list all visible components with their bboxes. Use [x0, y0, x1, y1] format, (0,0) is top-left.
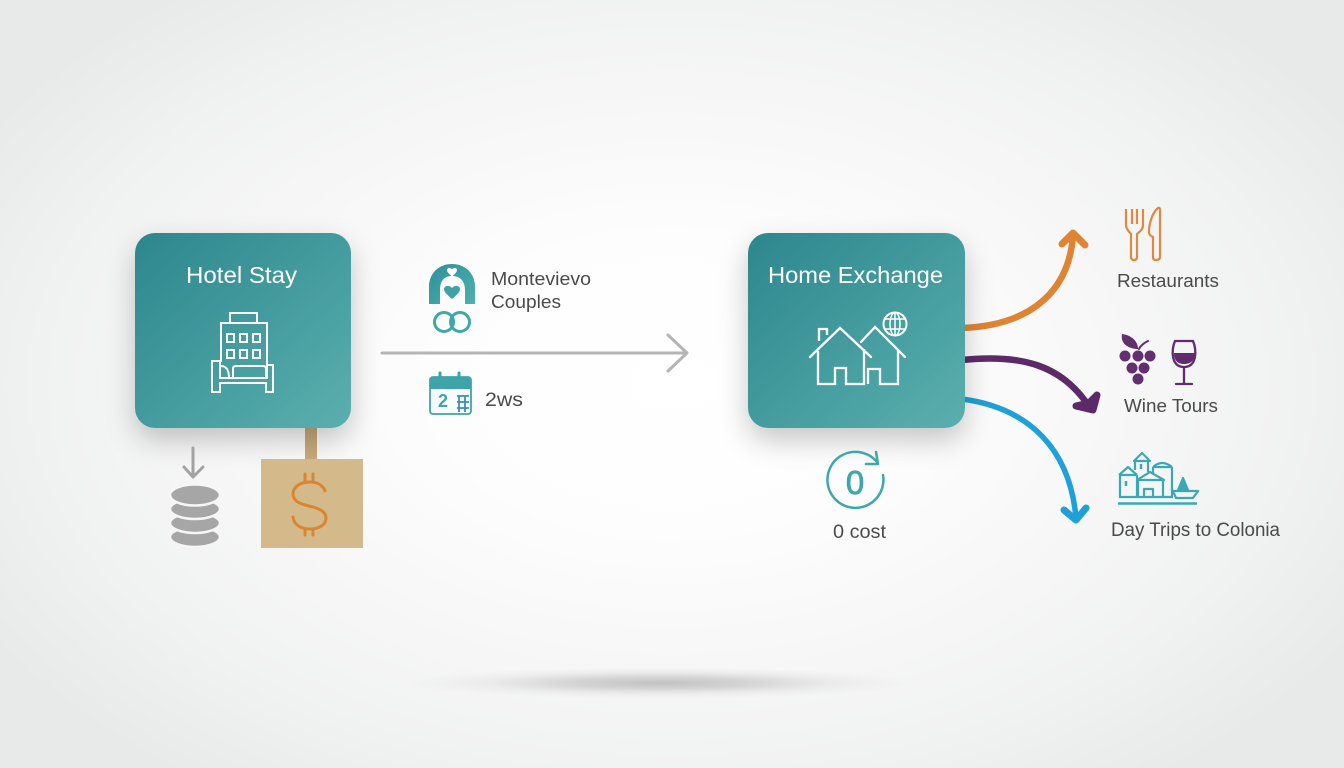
heading: Hotel Stay: Hotel Stay: [186, 262, 298, 288]
arrow: restaurants: [962, 233, 1085, 328]
icon: couple arch with rings: [429, 264, 475, 332]
text: Montevievo Couples: [491, 268, 591, 312]
connector: hotel card to cost box: [305, 425, 317, 461]
heading: Home Exchange: Home Exchange: [768, 262, 943, 288]
icon: hotel and bed: [212, 313, 273, 392]
icon: colonia town and boat: [1118, 453, 1198, 504]
icon: calendar: [430, 373, 471, 414]
arrow: wine tours: [962, 358, 1097, 410]
floor shadow: [405, 667, 915, 699]
panel: Home Exchange: [748, 233, 965, 428]
icon: dollar: [293, 474, 326, 535]
panel: Hotel Stay: [135, 233, 351, 428]
icon: calendar: 2: [438, 391, 448, 411]
icon: two houses with globe: [810, 312, 906, 384]
text: Wine Tours: Wine Tours: [1124, 395, 1218, 416]
panel: cost box with dollar icon: [261, 459, 363, 548]
icon: zero cost cycle: 0: [846, 464, 864, 501]
icon: down arrow: [184, 448, 203, 477]
arrow: hotel to home exchange: [382, 335, 687, 371]
icon: wine glass: [1173, 341, 1195, 384]
text: 0 cost: 0 cost: [833, 522, 887, 543]
icon: fork and knife: [1126, 208, 1160, 260]
icon: zero cost cycle: [827, 452, 883, 508]
text: Restaurants: Restaurants: [1117, 270, 1219, 291]
text: Day Trips to Colonia: Day Trips to Colonia: [1111, 520, 1280, 541]
icon: grapes: [1120, 334, 1156, 384]
arrow: day trips: [962, 399, 1086, 520]
text: 2ws: 2ws: [485, 390, 523, 411]
icon: coin stack: [170, 484, 220, 547]
text: Montevievo Couples: Montevievo: [491, 268, 591, 289]
text: Montevievo Couples: Couples: [491, 291, 561, 312]
